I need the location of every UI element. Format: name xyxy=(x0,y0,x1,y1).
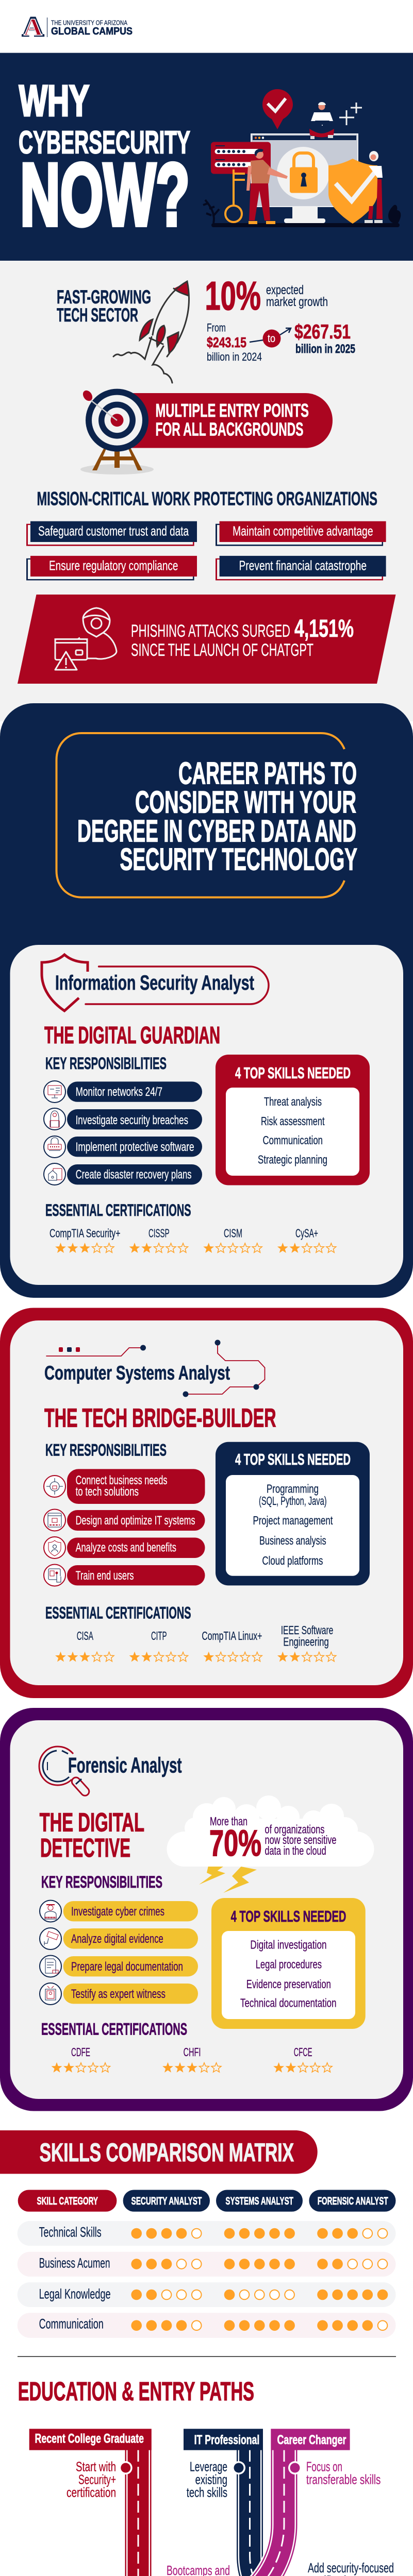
road markers and text: graduate: Security+ xyxy=(78,2472,116,2487)
title outline xyxy=(86,967,269,1004)
stat: 10 percent market growth: From xyxy=(207,321,226,334)
certifications: CISM xyxy=(224,1227,242,1240)
callout: cloud stat xyxy=(167,1795,374,1893)
certifications: CySA+ xyxy=(295,1227,318,1240)
banner: phishing attacks xyxy=(18,595,396,684)
banner: phishing attacks: 4,151% xyxy=(294,615,354,642)
certifications: IEEE Software xyxy=(281,1623,333,1637)
card: information security analyst xyxy=(10,945,403,1285)
stat: 10 percent market growth: $267.51 xyxy=(294,321,351,343)
icon: shield outline xyxy=(42,955,88,1011)
title: Forensic Analyst xyxy=(68,1753,182,1777)
responsibility: expert witness xyxy=(40,1983,198,2005)
responsibility: design: Design and optimize IT systems xyxy=(76,1514,195,1528)
stat: 10 percent market growth: market growth xyxy=(266,295,328,309)
responsibility: disaster recovery: Create disaster recovery plans xyxy=(76,1168,192,1182)
stat: 10 percent market growth: billion in 2024 xyxy=(207,350,262,363)
certifications: CompTIA Linux+ xyxy=(202,1629,262,1642)
certifications xyxy=(55,1623,336,1662)
callout: cloud stat: now store sensitive xyxy=(265,1833,336,1846)
banner: skills comparison matrix xyxy=(0,2130,318,2174)
responsibility: investigate xyxy=(44,1108,202,1130)
skills box: Project management xyxy=(253,1514,333,1527)
road markers and text: graduate: Start with xyxy=(76,2459,116,2475)
header logo: A xyxy=(22,11,44,42)
title: Computer Systems Analyst xyxy=(44,1363,230,1384)
subtitle: THE DIGITAL GUARDIAN xyxy=(44,1022,220,1048)
heading: ESSENTIAL CERTIFICATIONS xyxy=(45,1201,191,1219)
responsibility: analyze costs xyxy=(44,1537,205,1558)
stat: 10 percent market growth: billion in 2025 xyxy=(295,342,355,356)
skills box: (SQL, Python, Java) xyxy=(259,1494,327,1507)
certifications: Engineering xyxy=(283,1635,329,1649)
stat: fast-growing tech sector: FAST-GROWING xyxy=(57,286,151,308)
callout: cloud stat: data in the cloud xyxy=(265,1844,326,1857)
heading: ESSENTIAL CERTIFICATIONS xyxy=(41,2020,187,2038)
header logo xyxy=(22,11,133,42)
heading: KEY RESPONSIBILITIES xyxy=(45,1054,167,1073)
road: recent college graduate xyxy=(29,2429,216,2576)
road markers and text: IT professional: tech skills xyxy=(187,2485,227,2500)
hero title xyxy=(19,76,190,244)
matrix row: business acumen xyxy=(18,2252,395,2277)
heading: career paths xyxy=(77,756,357,877)
matrix row: communication xyxy=(18,2313,395,2338)
stat: 10 percent market growth xyxy=(205,273,355,363)
box: safeguard customer trust xyxy=(26,521,197,546)
responsibility: implement xyxy=(44,1136,202,1158)
road markers and text: graduate xyxy=(67,2459,232,2576)
icon: red pin check xyxy=(262,89,293,129)
certifications: CFCE xyxy=(294,2045,312,2059)
responsibility: investigate: Investigate security breaches xyxy=(76,1113,188,1127)
header logo: THE UNIVERSITY OF ARIZONA xyxy=(51,19,127,27)
responsibility: train: Train end users xyxy=(76,1569,134,1583)
matrix row: technical skills xyxy=(18,2221,395,2246)
banner: multiple entry points: FOR ALL BACKGROUNDS xyxy=(156,418,303,440)
certifications xyxy=(49,1227,336,1253)
skills box: Evidence preservation xyxy=(246,1977,331,1991)
subtitle: DETECTIVE xyxy=(40,1833,130,1862)
box: safeguard customer trust: Safeguard customer trust and data xyxy=(38,523,189,539)
responsibility: train xyxy=(44,1564,205,1586)
title: Information Security Analyst xyxy=(55,972,254,994)
responsibility: expert witness: Testify as expert witness xyxy=(71,1987,166,2001)
heading: education and entry paths: EDUCATION & ENTRY PATHS xyxy=(18,2377,254,2406)
header logo: GLOBAL CAMPUS xyxy=(51,26,133,37)
road: IT professional: IT Professional xyxy=(194,2433,259,2447)
certifications: CITP xyxy=(151,1629,167,1642)
road: recent college graduate: Recent College Graduate xyxy=(35,2432,144,2446)
road markers and text: graduate: certification xyxy=(67,2485,116,2500)
panel: hero xyxy=(0,53,413,261)
responsibility: digital evidence: Analyze digital evidence xyxy=(71,1932,163,1946)
callout: cloud stat: of organizations xyxy=(265,1823,325,1836)
responsibility: connect xyxy=(44,1469,205,1504)
responsibility: connect: to tech solutions xyxy=(76,1485,139,1499)
card: forensic analyst xyxy=(0,1708,413,2111)
icon: magnifying glass xyxy=(39,1747,91,1798)
responsibility: implement: Implement protective software xyxy=(76,1140,194,1154)
responsibility: connect: Connect business needs xyxy=(76,1473,167,1487)
heading: KEY RESPONSIBILITIES xyxy=(45,1441,167,1460)
matrix row: technical skills: Technical Skills xyxy=(39,2224,102,2240)
skills box: 4 TOP SKILLS NEEDED xyxy=(235,1450,351,1468)
skills box: Technical documentation xyxy=(240,1996,336,2010)
matrix row: legal knowledge: Legal Knowledge xyxy=(39,2286,111,2302)
stat: fast-growing tech sector xyxy=(57,286,151,326)
road markers and text: IT professional: existing xyxy=(195,2472,227,2487)
box: competitive advantage xyxy=(216,521,386,546)
hero illustration: security scene xyxy=(203,89,401,227)
skills box: Programming xyxy=(267,1482,319,1495)
skills box xyxy=(216,1055,370,1185)
hero title: WHY xyxy=(19,76,89,125)
subtitle xyxy=(40,1807,144,1862)
skills box: Legal procedures xyxy=(256,1958,322,1971)
matrix header: SECURITY ANALYST xyxy=(131,2195,202,2207)
responsibility: digital evidence xyxy=(40,1928,198,1950)
callout: cloud stat: More than xyxy=(210,1815,247,1828)
icon: target xyxy=(80,388,154,474)
banner: multiple entry points: MULTIPLE ENTRY POINTS xyxy=(156,400,309,421)
matrix header: SKILL CATEGORY xyxy=(37,2195,98,2207)
box: regulatory compliance: Ensure regulatory compliance xyxy=(49,558,178,573)
bracket: orange frame xyxy=(57,733,344,897)
banner: phishing attacks: PHISHING ATTACKS SURGED xyxy=(131,621,290,641)
road markers and text: career changer: transferable skills xyxy=(306,2472,381,2487)
hero title: NOW? xyxy=(20,145,190,244)
heading: ESSENTIAL CERTIFICATIONS xyxy=(45,1604,191,1622)
subtitle: THE DIGITAL xyxy=(40,1807,144,1837)
skills box: Risk assessment xyxy=(261,1114,325,1128)
panel: career paths and information security analyst card xyxy=(0,703,413,1298)
banner: skills comparison matrix: SKILLS COMPARISON MATRIX xyxy=(40,2138,294,2167)
callout: cloud stat: 70% xyxy=(209,1823,261,1864)
road: IT professional xyxy=(184,2429,339,2576)
skills box: Communication xyxy=(263,1133,323,1147)
responsibility: legal documentation xyxy=(40,1956,198,1977)
responsibility: legal documentation: Prepare legal documentation xyxy=(71,1960,183,1974)
responsibility: monitor xyxy=(44,1081,202,1103)
responsibility: monitor: Monitor networks 24/7 xyxy=(76,1085,162,1099)
responsibility: cyber crimes xyxy=(40,1900,198,1922)
stat: 10 percent market growth: $243.15 xyxy=(207,334,246,350)
card: computer systems analyst xyxy=(0,1308,413,1698)
stat: 10 percent market growth: to xyxy=(268,333,275,345)
responsibility: design xyxy=(44,1510,205,1531)
skills box xyxy=(211,1898,366,2029)
icon: hacker with warning xyxy=(55,608,117,670)
circuit decoration xyxy=(46,1340,265,1397)
icon: rocket xyxy=(113,281,189,383)
matrix header xyxy=(18,2190,395,2212)
box: regulatory compliance xyxy=(26,556,197,580)
certifications: CompTIA Security+ xyxy=(49,1227,121,1240)
skills box: 4 TOP SKILLS NEEDED xyxy=(235,1064,351,1082)
skills box: Business analysis xyxy=(259,1534,326,1547)
matrix header: SYSTEMS ANALYST xyxy=(225,2195,293,2207)
responsibility: disaster recovery xyxy=(44,1163,202,1185)
road: career changer xyxy=(30,2429,350,2576)
responsibility: analyze costs: Analyze costs and benefits xyxy=(76,1540,176,1554)
header logo: A xyxy=(24,14,42,41)
box: financial catastrophe xyxy=(216,556,386,580)
certifications: CISA xyxy=(77,1629,93,1642)
road: career changer: Career Changer xyxy=(277,2433,346,2447)
skills box: Digital investigation xyxy=(250,1938,327,1952)
subtitle: THE TECH BRIDGE-BUILDER xyxy=(44,1403,276,1433)
box: financial catastrophe: Prevent financial catastrophe xyxy=(239,558,367,573)
stat: fast-growing tech sector: TECH SECTOR xyxy=(57,304,138,326)
banner: phishing attacks: SINCE THE LAUNCH OF CHATGPT xyxy=(131,640,313,660)
certifications: CDFE xyxy=(71,2045,90,2059)
certifications: CHFI xyxy=(184,2045,201,2059)
matrix row: legal knowledge xyxy=(18,2282,395,2307)
skills box: Cloud platforms xyxy=(262,1554,323,1567)
stat: 10 percent market growth: 10% xyxy=(205,273,261,318)
matrix row: communication: Communication xyxy=(39,2316,104,2331)
responsibility: cyber crimes: Investigate cyber crimes xyxy=(71,1905,164,1919)
skills box: Threat analysis xyxy=(264,1095,322,1108)
skills box xyxy=(216,1442,370,1585)
matrix row: business acumen: Business Acumen xyxy=(39,2255,110,2270)
certifications: CISSP xyxy=(148,1227,170,1240)
skills box: 4 TOP SKILLS NEEDED xyxy=(231,1907,346,1925)
road markers and text: IT professional: Leverage xyxy=(190,2459,227,2475)
banner: multiple entry points xyxy=(124,393,333,448)
hero title: CYBERSECURITY xyxy=(19,125,190,161)
road markers and text: career changer: Focus on xyxy=(306,2459,342,2475)
road markers and text: IT professional xyxy=(187,2459,394,2576)
heading: KEY RESPONSIBILITIES xyxy=(41,1873,162,1891)
stat: 10 percent market growth: expected xyxy=(266,283,304,297)
skills box: Strategic planning xyxy=(258,1153,327,1166)
certifications xyxy=(52,2045,332,2073)
road markers and text: career changer xyxy=(35,2459,381,2576)
